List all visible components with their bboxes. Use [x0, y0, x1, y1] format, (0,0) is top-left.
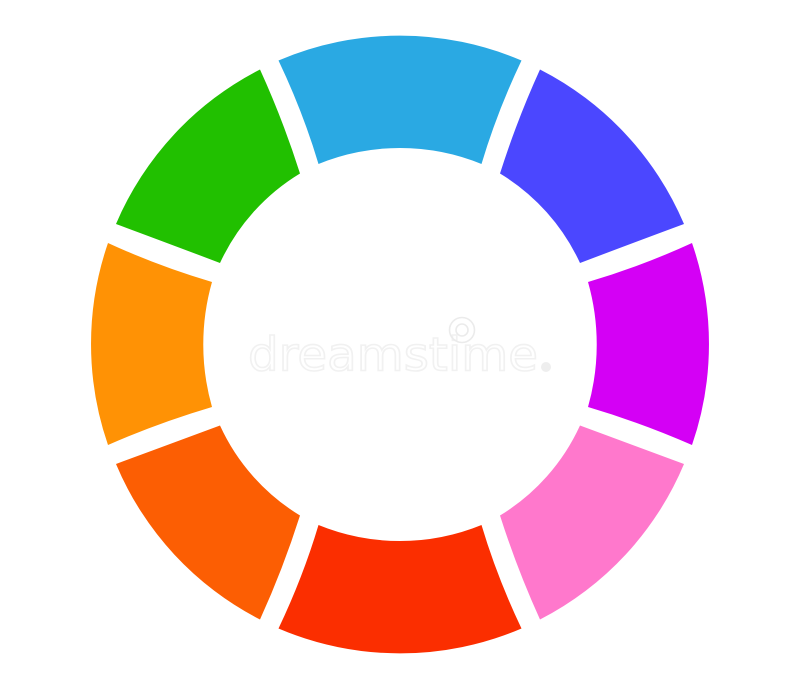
segment: dark orange, lower left [116, 426, 300, 620]
segment: magenta, right [588, 243, 709, 445]
segment: pink, lower right [500, 426, 684, 620]
segment: red, bottom [278, 525, 522, 653]
watermark dot [541, 362, 551, 372]
watermark wordmark: dreamstime [248, 328, 538, 382]
watermark: dreamstime logo text [248, 318, 551, 382]
segment: sky blue, top [278, 36, 522, 164]
segment: orange, left [91, 243, 212, 445]
watermark spiral icon [450, 318, 474, 342]
segment: indigo, upper right [500, 70, 684, 263]
donut chart: eight coloured segments [91, 36, 709, 653]
segment: green, upper left [116, 70, 300, 263]
